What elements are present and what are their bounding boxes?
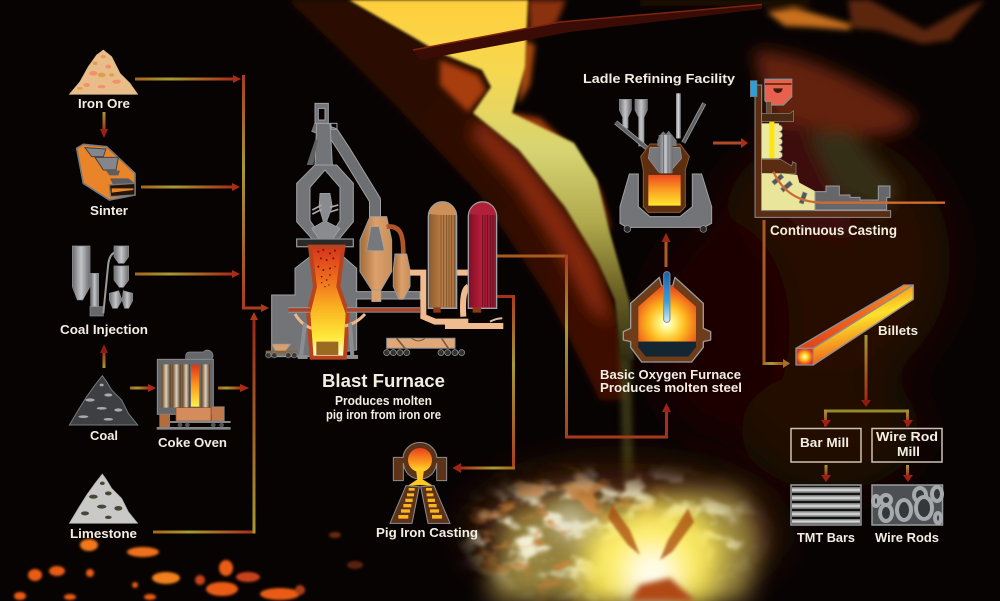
arrow: coal to coal injection (100, 344, 108, 368)
panel: wire rod mill: Wire Rod (876, 429, 938, 444)
top mast (315, 103, 328, 123)
strand (773, 172, 945, 203)
slag car (266, 344, 297, 358)
image: wire rods (872, 485, 942, 525)
label: coal injection: Coal Injection (60, 322, 148, 337)
arrow: iron ore to sinter (100, 112, 108, 138)
arrow: coke oven to bus (218, 384, 249, 392)
stove one (428, 202, 457, 313)
text: blast furnace description: pig iron from iron ore (326, 408, 441, 422)
connector arrows (100, 75, 913, 534)
furnace top housing (297, 165, 353, 244)
label: coke oven: Coke Oven (158, 435, 227, 450)
arrow: collector bus into blast furnace (242, 75, 269, 312)
background: ladle pipe across the stream (413, 4, 762, 60)
background: molten stream (349, 0, 634, 360)
torpedo car (384, 338, 465, 356)
arrow: basic oxygen furnace to ladle (662, 233, 670, 267)
icon: coal pile (69, 376, 138, 425)
background: faint green streak below the stream (618, 300, 634, 520)
icon: basic oxygen furnace (623, 272, 711, 362)
stove two (468, 202, 497, 313)
arrow: ladle to continuous casting (713, 138, 748, 148)
background: hillside lit rim (470, 118, 612, 325)
peach gas mains (410, 273, 503, 326)
icon: blast furnace (266, 103, 503, 359)
icon: continuous casting machine (750, 79, 945, 217)
text: blast furnace description (326, 394, 441, 422)
icon: limestone pile (69, 474, 138, 523)
icon: sinter plant (77, 144, 135, 200)
label: sinter: Sinter (90, 203, 128, 218)
machine frame (755, 85, 891, 217)
furnace hearth body (308, 247, 348, 358)
dust catcher (360, 217, 403, 302)
background: dark red hillside (288, 0, 628, 400)
mould section (762, 123, 779, 159)
cooling zone (762, 173, 816, 210)
funnels and lances (616, 93, 704, 149)
straightening machinery (815, 186, 890, 210)
cyclone (393, 254, 410, 299)
icon: coke oven (157, 350, 231, 430)
background: glowing embers lower left (14, 532, 363, 600)
label: continuous casting: Continuous Casting (770, 223, 897, 238)
panel: bar mill (791, 428, 861, 462)
icon: pig iron casting (390, 442, 450, 523)
arrow: coal to coke oven (130, 384, 156, 392)
cradle (620, 174, 712, 227)
charging bell (312, 193, 340, 243)
electrodes (657, 131, 677, 146)
label: billets: Billets (878, 323, 918, 338)
panel: wire rod mill: Mill (897, 444, 920, 459)
burden particles (317, 249, 336, 287)
rollers (772, 174, 807, 204)
arrow: limestone to blast furnace (153, 312, 258, 534)
ladle shell (641, 144, 689, 212)
label: ladle refining facility: Ladle Refining Facility (583, 71, 736, 86)
tundish (762, 111, 793, 122)
icon: coal injection plant (72, 246, 133, 316)
arrow: billets to mills (821, 335, 913, 427)
background: stream orange edge (508, 0, 612, 232)
arrow: continuous casting to billets (762, 220, 790, 368)
background: flames upper right (753, 50, 915, 240)
bustle pipe (288, 302, 420, 318)
furnace legs (301, 323, 352, 357)
background: slag mottling (475, 483, 745, 587)
label: wire rods: Wire Rods (875, 530, 939, 545)
title: blast furnace: Blast Furnace (322, 371, 445, 391)
background: right-side maroon haze (650, 130, 950, 490)
panel: wire rod mill (872, 428, 942, 462)
label: pig iron casting: Pig Iron Casting (376, 525, 478, 540)
background: top-right lit folds (640, 0, 985, 44)
label: iron ore: Iron Ore (78, 96, 130, 111)
label: TMT bars: TMT Bars (797, 530, 855, 545)
furnace base (272, 257, 420, 357)
panel: bar mill: Bar Mill (800, 435, 849, 450)
molten steel (648, 175, 681, 206)
icon: billet (796, 285, 913, 365)
label: basic oxygen furnace (600, 367, 742, 395)
arrow: iron ore to bus (135, 75, 241, 83)
icon: iron ore pile (69, 50, 138, 94)
icon: ladle refining facility (616, 93, 712, 232)
arrow: bar mill to TMT bars (821, 465, 831, 482)
background: slag glowing core (554, 505, 725, 601)
label: coal: Coal (90, 428, 118, 443)
label: basic oxygen furnace: Produces molten steel (600, 380, 742, 395)
text: blast furnace description: Produces molten (335, 394, 432, 408)
background: bright slag pool (475, 470, 775, 601)
arrow: blast furnace to pig iron casting (452, 295, 515, 473)
collar (297, 239, 353, 247)
label: limestone: Limestone (70, 526, 137, 541)
casting ladle (765, 79, 792, 105)
arrow: blast furnace to basic oxygen furnace (497, 254, 671, 438)
image: TMT bars (791, 485, 861, 525)
arrow: coal injection to bus (135, 270, 240, 278)
label: basic oxygen furnace: Basic Oxygen Furnace (600, 367, 741, 382)
uptake pipe (313, 126, 375, 227)
arrow: sinter to bus (141, 183, 240, 191)
arrow: wire rod mill to wire rods (903, 465, 913, 482)
